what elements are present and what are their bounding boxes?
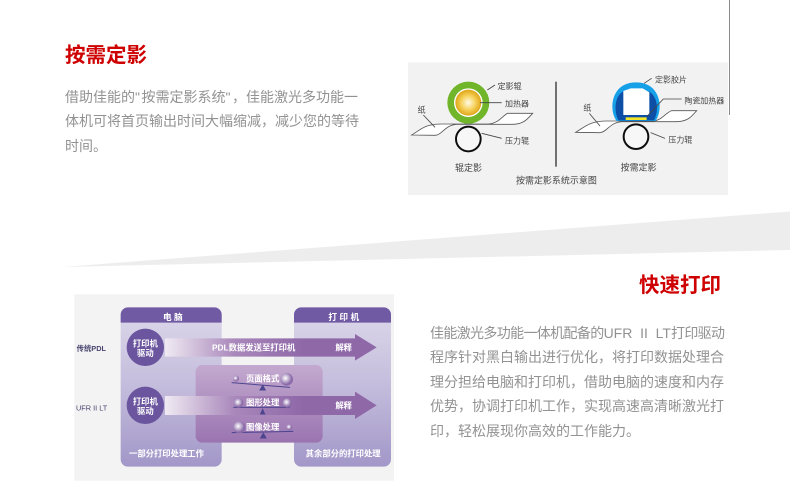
on-demand fixing illustration: 定影胶片 [655,75,687,85]
computer column: 一部分打印处理工作 [129,449,205,459]
arrow: PDL: 解释 [335,343,353,353]
driver circles [127,329,164,424]
arrow: PDL [165,334,377,361]
text block: fast printing: 佳能激光多功能一体机配备的UFR II LT打印驱动 程序针对黑白输出进行优化，将打印数据处理合 理分担给电脑和打印机，借助电脑的速度和内存 优势，协调打印机工作，实现高速高清晰激光打 印，轻松展现你高效的工作能力。 [430,325,724,439]
row labels: UFR II LT [76,404,108,413]
on-demand fixing illustration: 纸 [583,102,591,112]
computer column [121,307,222,467]
printer column: 打 印 机 [328,311,359,322]
roller fixing illustration: 压力辊 [505,136,529,146]
row labels: 传统PDL [77,344,107,353]
driver circles: 打印机 [133,397,158,407]
computer column: 电 脑 [163,311,183,322]
balance scales: 图形处理 [246,397,280,407]
on-demand fixing illustration [576,75,724,172]
text block: on-demand fixing: 借助佳能的"按需定影系统"，佳能激光多功能一 体机可将首页输出时间大幅缩减，减少您的等待 时间。 [65,89,359,154]
balance scales: 图像处理 [246,422,280,432]
balance scales: 页面格式 [246,374,280,384]
row labels [76,344,108,413]
balance scales [232,373,293,438]
middle processing panel [196,365,323,443]
divider wedge [62,212,790,267]
on-demand fixing illustration: 按需定影 [621,161,657,172]
on-demand fixing illustration: 压力辊 [668,134,692,144]
panel: fixing system diagram [408,62,728,195]
driver circles: 驱动 [137,348,154,358]
top right vertical line [729,0,730,115]
roller fixing illustration: 定影辊 [498,81,522,91]
heading: fast printing: 快速打印 [639,274,721,297]
arrow: UFR [165,392,377,419]
roller fixing illustration [412,81,533,173]
heading: on-demand fixing: 按需定影 [65,44,147,67]
center divider [555,82,557,167]
diagram caption: 按需定影系统示意图 [516,174,597,185]
arrow: UFR: 解释 [335,401,353,411]
panel: print process diagram [74,294,394,481]
driver circles: 打印机 [133,339,158,349]
printer column: 其余部分的打印处理 [306,449,381,459]
driver circles: 驱动 [137,406,154,416]
roller fixing illustration: 辊定影 [455,162,482,173]
roller fixing illustration: 纸 [418,104,426,114]
printer column [294,307,391,467]
arrow: PDL: PDL数据发送至打印机 [212,343,296,353]
on-demand fixing illustration: 陶瓷加热器 [684,96,724,106]
roller fixing illustration: 加热器 [505,98,529,108]
